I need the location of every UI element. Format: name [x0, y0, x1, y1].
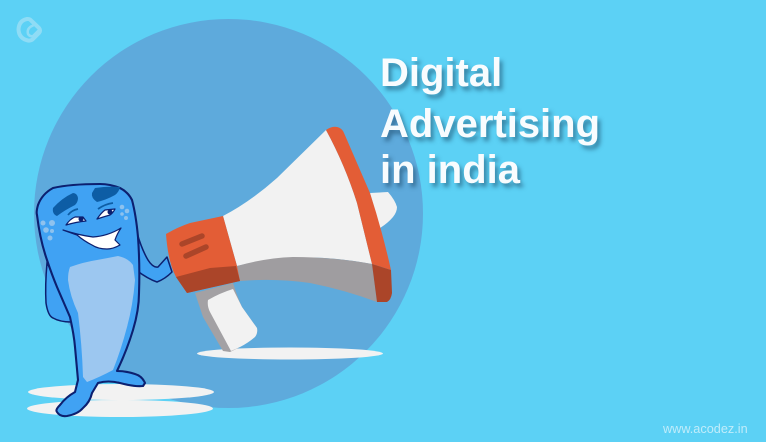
- title: in india: [380, 148, 521, 192]
- ground shadows: [27, 348, 383, 417]
- horn rim orange: [326, 127, 391, 270]
- smile: [63, 228, 121, 249]
- back fin: [46, 263, 71, 322]
- background circle: [34, 19, 423, 408]
- arm: [136, 233, 172, 282]
- back knob: [370, 192, 397, 228]
- handle: [195, 283, 257, 352]
- title: Advertising: [380, 102, 600, 146]
- eyebrows: [53, 187, 120, 216]
- mouthpiece dark: [176, 266, 240, 293]
- belly: [68, 256, 135, 382]
- upper eyelids: [68, 203, 113, 215]
- mouthpiece slots: [182, 236, 206, 256]
- whale mascot: [37, 184, 172, 416]
- mouthpiece orange: [166, 216, 240, 293]
- logo icon: [18, 19, 40, 41]
- megaphone: [166, 127, 397, 352]
- eyes: [66, 209, 115, 225]
- website url: www.acodez.in: [662, 422, 748, 436]
- horn white: [223, 130, 372, 266]
- horn grey: [237, 257, 377, 302]
- title: [380, 51, 600, 192]
- body: [37, 184, 145, 416]
- freckles: [40, 205, 129, 240]
- horn rim dark: [372, 264, 392, 302]
- title: Digital: [380, 51, 502, 95]
